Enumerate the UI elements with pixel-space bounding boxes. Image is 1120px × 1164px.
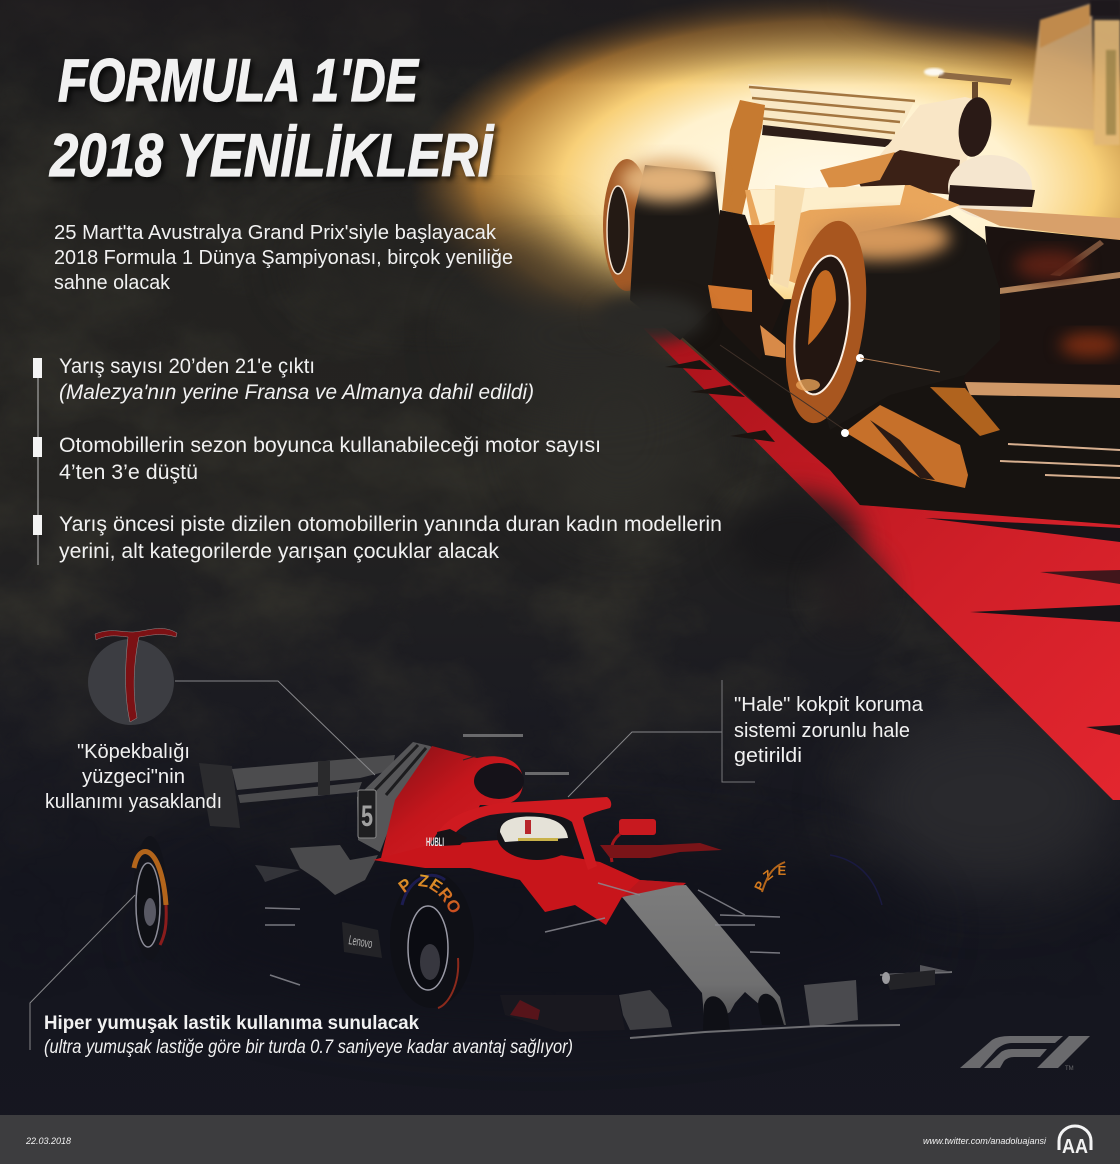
car: engine cover xyxy=(745,185,960,288)
illustration: Ferrari F1 car xyxy=(132,734,952,1039)
deck wings near cockpit xyxy=(600,843,722,858)
callout text: tyre xyxy=(44,1013,573,1058)
callout text: halo: sistemi zorunlu hale xyxy=(734,720,910,742)
intro text xyxy=(54,222,513,294)
callout text: tyre: (ultra yumuşak lastiğe göre bir turda 0.7 saniyeye kadar avantaj sağlıyor) xyxy=(44,1037,573,1058)
list item 3: yerini, alt kategorilerde yarışan çocuklar alacak xyxy=(59,540,499,563)
background: dark smoke texture and sunset glow xyxy=(0,0,1120,894)
list: 2018 changes xyxy=(33,355,722,565)
callout text: shark fin xyxy=(45,741,222,813)
far front tyre xyxy=(754,854,882,905)
date: 22.03.2018 xyxy=(25,1136,71,1146)
main red bodywork xyxy=(373,840,686,925)
car body shadow xyxy=(160,835,920,1025)
halo cockpit protection: HUBLI xyxy=(426,835,444,849)
callout text: shark fin: kullanımı yasaklandı xyxy=(45,791,222,813)
list item 2 xyxy=(59,434,601,484)
intro text: 25 Mart'ta Avustralya Grand Prix'siyle başlayacak xyxy=(54,222,497,244)
car: rear tyre xyxy=(603,158,722,340)
callout text: halo xyxy=(734,694,924,767)
list item 1: (Malezya'nın yerine Fransa ve Almanya dahil edildi) xyxy=(59,381,534,404)
grey nose xyxy=(622,880,786,1030)
title xyxy=(49,47,495,189)
logo: Anadolu Agency: AA xyxy=(1062,1136,1088,1158)
far front tyre: P Z E xyxy=(754,866,786,891)
intro text: 2018 Formula 1 Dünya Şampiyonası, birçok yeniliğe xyxy=(54,247,513,269)
mirror xyxy=(611,819,656,862)
bullet marker 2 xyxy=(33,437,42,457)
front tyre with P Zero marking: P ZERO xyxy=(398,874,460,912)
car: rear wing xyxy=(722,68,1012,215)
callout text: halo: getirildi xyxy=(734,745,802,767)
logo: Anadolu Agency xyxy=(1059,1126,1091,1158)
callout bracket: halo xyxy=(722,680,755,782)
callout line: shark fin xyxy=(175,681,375,775)
callout text: tyre: Hiper yumuşak lastik kullanıma sunulacak xyxy=(44,1013,419,1034)
list item 1 xyxy=(59,355,534,404)
list item 3 xyxy=(59,513,722,563)
rear wing xyxy=(199,755,395,828)
car: ground shadow xyxy=(672,295,1120,525)
list item 1: Yarış sayısı 20’den 21'e çıktı xyxy=(59,355,315,378)
title: 2018 YENİLİKLERİ xyxy=(49,122,495,189)
list item 2: Otomobillerin sezon boyunca kullanabileceği motor sayısı xyxy=(59,434,601,457)
car: big front tyre xyxy=(774,215,1000,430)
halo cockpit protection xyxy=(426,797,611,870)
front wing xyxy=(500,965,952,1038)
driver helmet xyxy=(497,812,577,860)
sidepod dark panel with sponsor: Lenovo xyxy=(347,932,374,951)
callout text: shark fin: "Köpekbalığı xyxy=(77,741,190,763)
intro text: sahne olacak xyxy=(54,272,171,294)
source url: www.twitter.com/anadoluajansi xyxy=(923,1136,1047,1147)
illustration: glowing race car at speed xyxy=(603,68,1120,525)
engine cover fin xyxy=(357,742,440,852)
callout line: tyre xyxy=(30,895,135,1050)
sidepod dark panel with sponsor xyxy=(342,922,382,958)
title: FORMULA 1'DE xyxy=(58,47,420,114)
illustration: red track with black spikes xyxy=(643,328,1120,800)
footer bar xyxy=(0,1115,1120,1164)
floor highlight lines xyxy=(265,883,780,985)
floor and rear body shadows xyxy=(255,845,378,895)
list item 2: 4’ten 3’e düştü xyxy=(59,461,198,484)
rear tyre xyxy=(133,836,167,960)
callout text: halo: "Hale" kokpit koruma xyxy=(734,694,924,716)
red engine cover xyxy=(381,746,524,858)
engine cover fin: 5 xyxy=(361,800,373,833)
car: right side body xyxy=(960,208,1120,400)
logo: F1 xyxy=(960,1036,1090,1072)
overlay: smoke hiding lower edge of car xyxy=(595,294,705,342)
car: nose and front wing xyxy=(720,345,1120,488)
roll hoop antennas xyxy=(463,734,569,775)
callout line: halo xyxy=(568,732,722,797)
callout text: shark fin: yüzgeci"nin xyxy=(82,766,185,788)
front tyre with P Zero marking xyxy=(398,874,460,1009)
bullet marker 1 xyxy=(33,358,42,378)
list item 3: Yarış öncesi piste dizilen otomobillerin yanında duran kadın modellerin xyxy=(59,513,722,536)
icon: banned shark fin xyxy=(88,628,177,725)
car: suspension and dark parts xyxy=(708,210,785,360)
logo: F1: TM xyxy=(1065,1066,1074,1072)
bullet marker 3 xyxy=(33,515,42,535)
car: airbox and cockpit xyxy=(820,95,1035,219)
illustration: city towers xyxy=(1028,0,1120,145)
